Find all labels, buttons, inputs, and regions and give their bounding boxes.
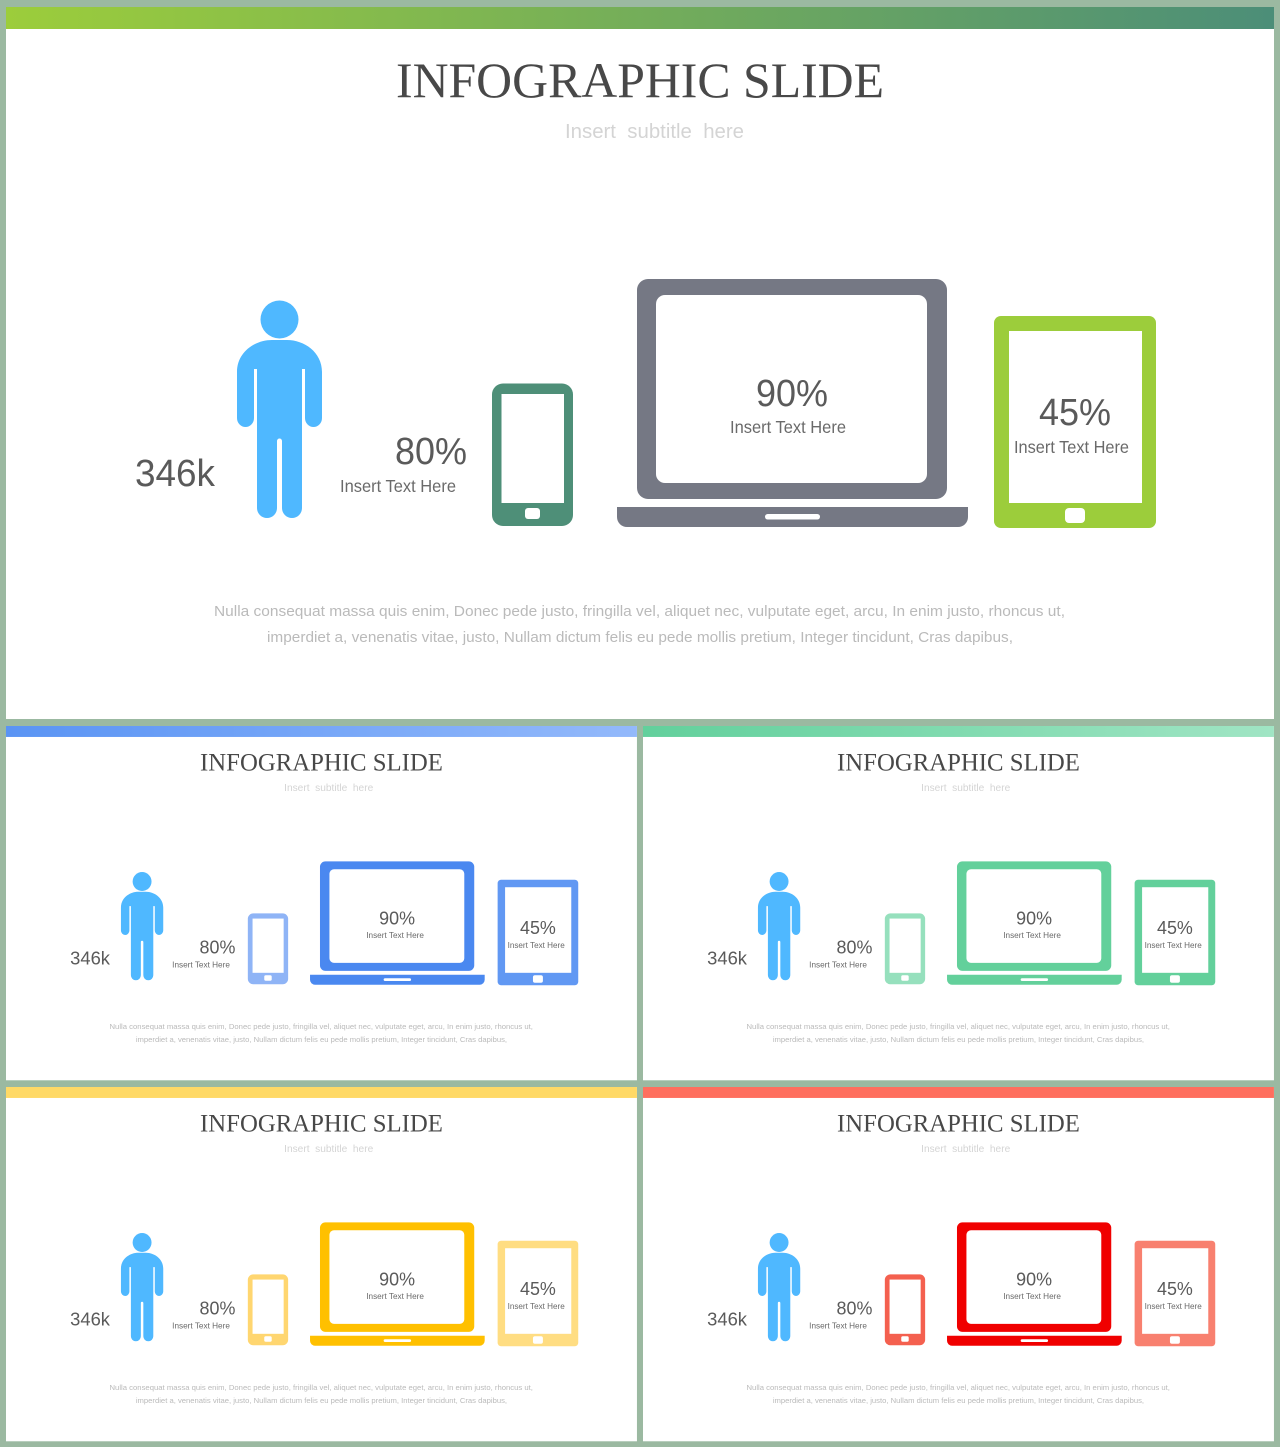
stat: 346k: 346k — [707, 1309, 748, 1330]
icon: tablet — [1135, 1241, 1215, 1346]
stat: 45% — [1014, 392, 1129, 457]
icon: person — [758, 872, 800, 980]
stat: 90% — [730, 373, 846, 437]
stat: 80%: 80% — [200, 937, 236, 958]
stat: 80% — [809, 937, 873, 969]
stat: 45% — [1145, 1279, 1202, 1311]
stat: 80%: Insert Text Here — [172, 1320, 230, 1330]
panel: main slide — [6, 7, 1274, 719]
icon: tablet — [498, 1241, 578, 1346]
icon: laptop — [310, 861, 485, 985]
stat: 80% — [172, 937, 236, 969]
icon: person — [121, 872, 163, 980]
stat: 90%: 90% — [379, 1270, 415, 1291]
title: INFOGRAPHIC SLIDE — [837, 1110, 1080, 1137]
icon: phone — [492, 384, 573, 526]
stat: 80%: 80% — [837, 1298, 873, 1319]
panel: green slide — [643, 726, 1274, 1080]
icon: laptop — [310, 1222, 485, 1346]
stat: 80% — [172, 1298, 236, 1330]
blue gradient bar — [6, 726, 637, 737]
subtitle: Insert subtitle here — [284, 1144, 374, 1155]
body text — [746, 1022, 1170, 1044]
stat: 346k: 346k — [70, 948, 111, 969]
body text: imperdiet a, venenatis vitae, justo, Nullam dictum felis eu pede mollis pretium, Integer tincidunt, Cras dapibus, — [136, 1396, 507, 1405]
stat: 90% — [366, 909, 424, 940]
stat: 45%: Insert Text Here — [1145, 940, 1202, 950]
stat: 80%: 80% — [200, 1298, 236, 1319]
body text — [746, 1383, 1170, 1405]
icon: phone — [248, 1274, 288, 1345]
body text: imperdiet a, venenatis vitae, justo, Nullam dictum felis eu pede mollis pretium, Integer tincidunt, Cras dapibus, — [773, 1035, 1144, 1044]
stat: 90%: 90% — [379, 909, 415, 930]
icon: phone — [885, 1274, 925, 1345]
body text — [109, 1383, 533, 1405]
stat: 346k: 346k — [707, 948, 748, 969]
body text: Nulla consequat massa quis enim, Donec pede justo, fringilla vel, aliquet nec, vulputate eget, arcu, In enim justo, rhoncus ut, — [109, 1022, 533, 1031]
green gradient bar — [643, 726, 1274, 737]
body text: imperdiet a, venenatis vitae, justo, Nullam dictum felis eu pede mollis pretium, Integer tincidunt, Cras dapibus, — [773, 1396, 1144, 1405]
title: INFOGRAPHIC SLIDE — [200, 1110, 443, 1137]
panel: yellow slide — [6, 1087, 637, 1441]
title: INFOGRAPHIC SLIDE — [396, 52, 884, 108]
subtitle: Insert subtitle here — [565, 121, 744, 143]
icon: tablet — [1135, 880, 1215, 985]
stat: 80% — [340, 431, 467, 496]
stat: 45%: 45% — [520, 918, 556, 939]
stat: 90%: 90% — [1016, 909, 1052, 930]
top gradient bar — [6, 7, 1274, 29]
stat: 346k: 346k — [70, 1309, 111, 1330]
stat: 90%: Insert Text Here — [1003, 930, 1061, 940]
stat: 45%: 45% — [1039, 392, 1111, 434]
icon: laptop — [947, 861, 1122, 985]
body text: Nulla consequat massa quis enim, Donec pede justo, fringilla vel, aliquet nec, vulputate eget, arcu, In enim justo, rhoncus ut, — [746, 1383, 1170, 1392]
stat: 80%: 80% — [837, 937, 873, 958]
icon: phone — [248, 913, 288, 984]
stat: 90%: 90% — [756, 373, 828, 415]
panel: red slide — [643, 1087, 1274, 1441]
icon: tablet — [498, 880, 578, 985]
stat: 90% — [1003, 1270, 1061, 1301]
stat: 45% — [1145, 918, 1202, 950]
stat: 90%: Insert Text Here — [1003, 1291, 1061, 1301]
body text: Nulla consequat massa quis enim, Donec pede justo, fringilla vel, aliquet nec, vulputate eget, arcu, In enim justo, rhoncus ut, — [214, 603, 1065, 620]
icon: phone — [885, 913, 925, 984]
body text: Nulla consequat massa quis enim, Donec pede justo, fringilla vel, aliquet nec, vulputate eget, arcu, In enim justo, rhoncus ut, — [109, 1383, 533, 1392]
body text: imperdiet a, venenatis vitae, justo, Nullam dictum felis eu pede mollis pretium, Integer tincidunt, Cras dapibus, — [267, 629, 1013, 646]
title: INFOGRAPHIC SLIDE — [200, 749, 443, 776]
panel: blue slide — [6, 726, 637, 1080]
stat: 90%: Insert Text Here — [730, 417, 846, 437]
stat: 80%: Insert Text Here — [809, 959, 867, 969]
icon: laptop — [617, 279, 968, 527]
stat: 90% — [1003, 909, 1061, 940]
stat: 90%: Insert Text Here — [366, 930, 424, 940]
stat: 45%: Insert Text Here — [1014, 437, 1129, 457]
stat: 45%: 45% — [1157, 1279, 1193, 1300]
body text — [109, 1022, 533, 1044]
icon: person — [237, 300, 322, 518]
stat: 346k: 346k — [135, 453, 216, 495]
icon: tablet — [994, 316, 1156, 528]
stat: 80%: Insert Text Here — [809, 1320, 867, 1330]
stat: 45%: Insert Text Here — [1145, 1301, 1202, 1311]
stat: 45% — [508, 1279, 565, 1311]
subtitle: Insert subtitle here — [284, 783, 374, 794]
stat: 90%: Insert Text Here — [366, 1291, 424, 1301]
subtitle: Insert subtitle here — [921, 783, 1011, 794]
yellow bar — [6, 1087, 637, 1098]
icon: person — [758, 1233, 800, 1341]
stat: 80% — [809, 1298, 873, 1330]
stat: 45%: 45% — [520, 1279, 556, 1300]
stat: 90%: 90% — [1016, 1270, 1052, 1291]
body text — [214, 603, 1065, 646]
stat: 45% — [508, 918, 565, 950]
stat: 45%: Insert Text Here — [508, 940, 565, 950]
stat: 45%: Insert Text Here — [508, 1301, 565, 1311]
body text: imperdiet a, venenatis vitae, justo, Nullam dictum felis eu pede mollis pretium, Integer tincidunt, Cras dapibus, — [136, 1035, 507, 1044]
body text: Nulla consequat massa quis enim, Donec pede justo, fringilla vel, aliquet nec, vulputate eget, arcu, In enim justo, rhoncus ut, — [746, 1022, 1170, 1031]
title: INFOGRAPHIC SLIDE — [837, 749, 1080, 776]
red bar — [643, 1087, 1274, 1098]
icon: person — [121, 1233, 163, 1341]
subtitle: Insert subtitle here — [921, 1144, 1011, 1155]
stat: 90% — [366, 1270, 424, 1301]
stat: 80%: 80% — [395, 431, 467, 473]
stat: 80%: Insert Text Here — [172, 959, 230, 969]
icon: laptop — [947, 1222, 1122, 1346]
stat: 80%: Insert Text Here — [340, 476, 456, 496]
stat: 45%: 45% — [1157, 918, 1193, 939]
